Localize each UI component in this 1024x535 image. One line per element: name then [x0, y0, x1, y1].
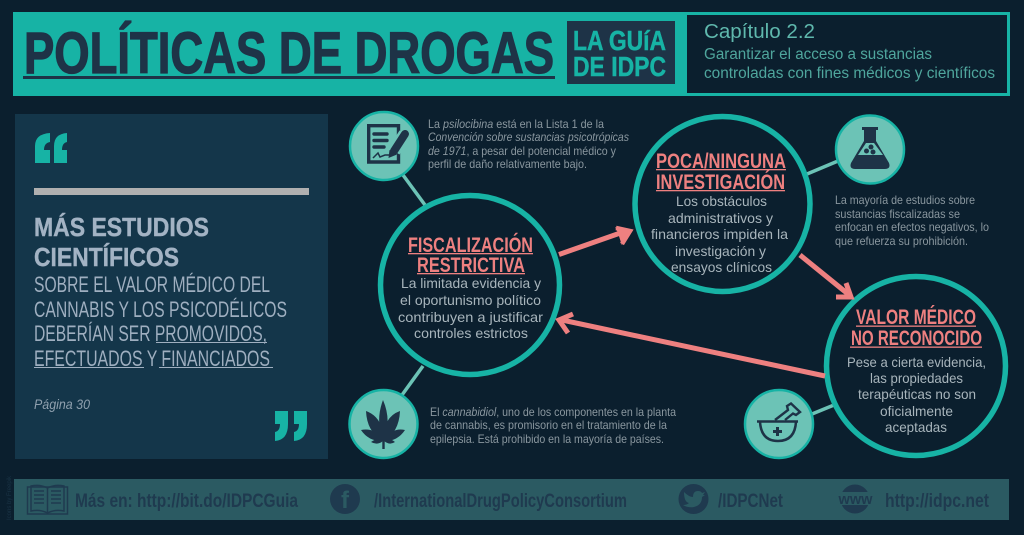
circle: valor médico no reconocido: terapéuticas no son: [858, 386, 976, 402]
badge: La Guía de IDPC: LA GUíA: [573, 25, 666, 56]
quote heading: MÁS ESTUDIOS: [34, 212, 209, 242]
circle: poca/ninguna investigación: investigación y: [675, 243, 766, 259]
icon: document and pen: [350, 112, 418, 180]
connector lines: [402, 161, 838, 414]
note: cannabidiol: El cannabidiol, uno de los componentes en la planta: [430, 405, 676, 419]
note: estudios: enfocan en efectos negativos, lo: [835, 220, 989, 234]
link: website: http://idpc.net: [885, 491, 990, 512]
quote body: SOBRE EL VALOR MÉDICO DEL: [34, 272, 270, 297]
icon: book: [28, 485, 68, 514]
chapter box: controladas con fines médicos y científicos: [704, 65, 995, 82]
icon: twitter: [678, 484, 708, 514]
circle: valor médico no reconocido: oficialmente: [880, 403, 953, 419]
quote body: DEBERÍAN SER PROMOVIDOS,: [34, 321, 267, 346]
circle: fiscalización restrictiva: controles estrictos: [414, 325, 528, 341]
circle: poca/ninguna investigación: Los obstáculos: [676, 193, 767, 209]
circle: valor médico no reconocido: VALOR MÉDICO: [856, 306, 976, 329]
link: facebook: /InternationalDrugPolicyConsortium: [374, 491, 627, 512]
note: psilocibina: La psilocibina está en la Lista 1 de la: [428, 117, 604, 131]
badge: La Guía de IDPC: DE IDPC: [573, 51, 666, 82]
circle: valor médico no reconocido: las propiedades: [870, 370, 963, 386]
icon: opening quote: [35, 133, 67, 163]
arrow: investigación to valor médico: [800, 255, 851, 297]
circle: poca/ninguna investigación: POCA/NINGUNA: [656, 150, 786, 173]
note: estudios: que refuerza su prohibición.: [835, 234, 968, 248]
circle: poca/ninguna investigación: INVESTIGACIÓN: [656, 170, 785, 194]
icon: www: [838, 484, 873, 514]
icon: flask: [836, 116, 904, 184]
badge: La Guía de IDPC: [567, 21, 675, 84]
note: cannabidiol: de cannabis, es promisorio en el tratamiento de la: [430, 418, 667, 432]
icon: facebook: [330, 484, 360, 514]
icon: facebook: f: [341, 487, 350, 514]
icon: mortar and pestle: [745, 390, 813, 458]
circle: valor médico no reconocido: Pese a cierta evidencia,: [847, 354, 986, 370]
page reference: Página 30: [34, 396, 90, 412]
circle: poca/ninguna investigación: [635, 116, 810, 292]
circle: fiscalización restrictiva: La limitada evidencia y: [401, 275, 541, 291]
circle: fiscalización restrictiva: el oportunismo político: [400, 292, 541, 308]
circle: fiscalización restrictiva: FISCALIZACIÓN: [408, 233, 533, 257]
arrow: fiscalización to investigación: [559, 228, 632, 254]
circle: poca/ninguna investigación: ensayos clínicos: [671, 259, 772, 275]
title: POLÍTICAS DE DROGAS: [24, 21, 554, 86]
note: cannabidiol: [430, 405, 676, 446]
header banner: [13, 12, 1010, 96]
quote body: [34, 272, 287, 371]
note: psilocibina: de 1971, a pesar del potencial médico y: [428, 144, 616, 158]
chapter box: Garantizar el acceso a sustancias: [704, 46, 932, 63]
circle: valor médico no reconocido: aceptadas: [885, 419, 947, 435]
quote heading: [34, 212, 209, 272]
circle: poca/ninguna investigación: financieros impiden la: [651, 226, 788, 242]
circle: valor médico no reconocido: [826, 276, 1006, 456]
circle: poca/ninguna investigación: administrativos y: [668, 210, 773, 226]
icon: www: www: [838, 491, 873, 508]
note: estudios: La mayoría de estudios sobre: [835, 193, 975, 207]
icon: closing quote: [275, 411, 307, 441]
credit: Icons by Freepik: [7, 475, 13, 520]
icon: cannabis leaf: [350, 390, 418, 458]
quote body: CANNABIS Y LOS PSICODÉLICOS: [34, 297, 287, 322]
note: estudios: sustancias fiscalizadas se: [835, 207, 960, 221]
chapter box: [687, 15, 1007, 93]
quote body: EFECTUADOS Y FINANCIADOS: [34, 346, 270, 371]
footer bar: [14, 479, 1009, 520]
arrow: valor médico to fiscalización: [559, 314, 825, 376]
circle: fiscalización restrictiva: RESTRICTIVA: [417, 254, 525, 277]
panel: quote: [15, 114, 328, 459]
note: estudios: [835, 193, 989, 248]
circle: fiscalización restrictiva: contribuyen a justificar: [398, 309, 543, 325]
circle: fiscalización restrictiva: [380, 196, 560, 374]
chapter box: Capítulo 2.2: [704, 21, 815, 43]
note: psilocibina: [428, 117, 629, 171]
link: more info: Más en: http://bit.do/IDPCGuia: [75, 491, 298, 512]
link: twitter: /IDPCNet: [718, 491, 784, 512]
note: psilocibina: perfil de daño relativamente bajo.: [428, 157, 587, 171]
quote heading: CIENTÍFICOS: [34, 242, 179, 272]
note: cannabidiol: epilepsia. Está prohibido en la mayoría de países.: [430, 432, 664, 446]
note: psilocibina: Convención sobre sustancias psicotrópicas: [428, 130, 629, 144]
